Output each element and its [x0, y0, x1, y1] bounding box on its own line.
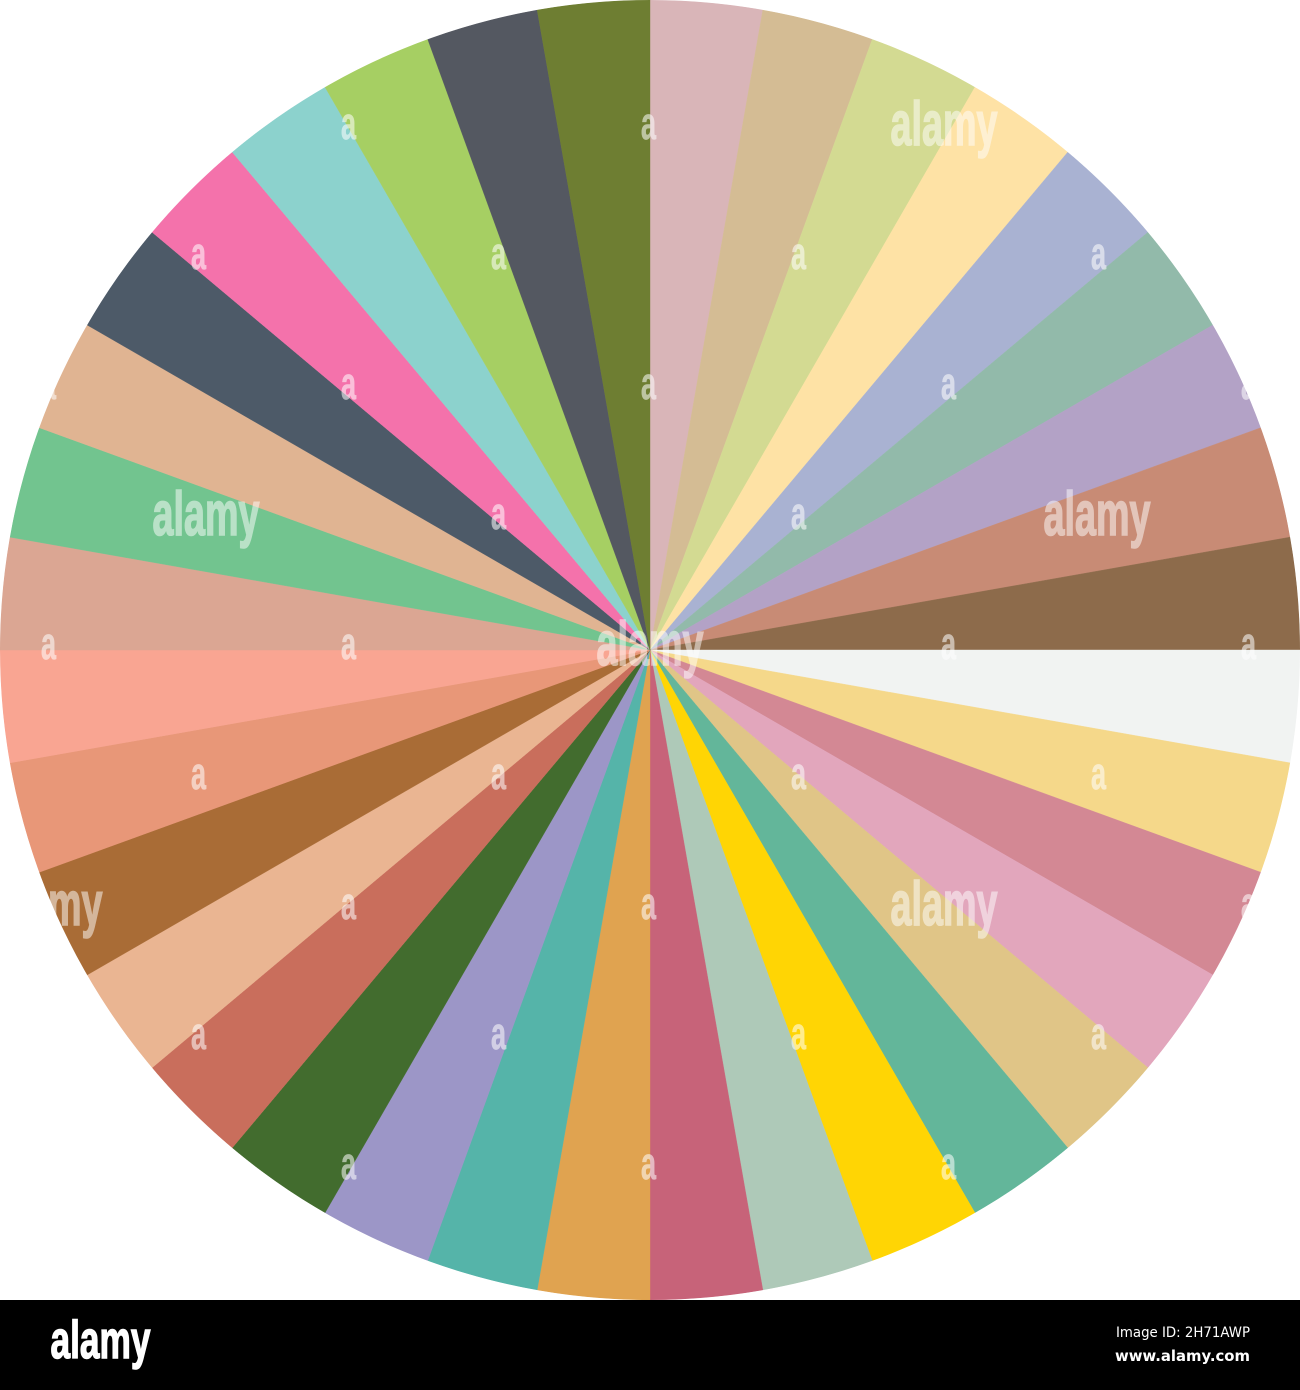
slice 24: peach tan [87, 650, 650, 1068]
footer logo: alamy [50, 1311, 151, 1370]
slice 6: sage green [650, 232, 1213, 650]
watermark: small repeated letters: a [1091, 228, 1107, 279]
watermark: small repeated letters: a [641, 878, 657, 929]
slice 1: dusty pink [650, 0, 763, 650]
slice 7: lavender [650, 325, 1261, 650]
slice 18: raspberry [650, 650, 763, 1300]
website: www.alamy.com [1115, 1347, 1250, 1365]
slice 27: light coral [0, 650, 650, 763]
watermark: small repeated letters: a [1241, 358, 1257, 409]
slice 15: jade [650, 650, 1068, 1213]
image id: Image ID: 2H71AWP [1116, 1325, 1250, 1341]
watermark: large brand words: alamy [890, 870, 998, 939]
slice 34: leaf green [325, 39, 650, 650]
slice 14: sand [650, 650, 1148, 1148]
watermark: large brand words: alamy [596, 610, 704, 679]
watermark: large brand words: alamy [152, 480, 260, 549]
slice 30: beige [39, 325, 650, 650]
slice 9: brown [650, 537, 1300, 650]
slice 25: ochre brown [39, 650, 650, 975]
watermark: small repeated letters: a [191, 748, 207, 799]
watermark: small repeated letters: a [491, 228, 507, 279]
watermark: small repeated letters: a [41, 358, 57, 409]
watermark: small repeated letters: a [191, 1008, 207, 1059]
watermark: small repeated letters: a [641, 358, 657, 409]
watermark: small repeated letters: a [791, 748, 807, 799]
slice 22: forest green [232, 650, 650, 1213]
watermark: small repeated letters [41, 98, 1257, 1189]
watermark: large brand words: alamy [0, 870, 103, 939]
slice 13: light pink [650, 650, 1213, 1068]
slice 11: light gold [650, 650, 1290, 872]
watermark: small repeated letters: a [791, 228, 807, 279]
watermark: small repeated letters: a [341, 98, 357, 149]
watermark: small repeated letters: a [491, 748, 507, 799]
watermark: large brand words: alamy [1044, 480, 1151, 549]
watermark: large brand words: alamy [890, 90, 998, 159]
watermark: small repeated letters: a [941, 618, 957, 669]
watermark: small repeated letters: a [941, 1138, 957, 1189]
slice 8: terracotta [650, 428, 1290, 650]
watermark: small repeated letters: a [341, 358, 357, 409]
slice 16: bright yellow [650, 650, 975, 1261]
slice 21: muted violet [325, 650, 650, 1261]
slice 26: salmon [10, 650, 650, 872]
watermark: small repeated letters: a [1241, 618, 1257, 669]
watermark: large brand words [0, 90, 1151, 939]
watermark: small repeated letters: a [491, 1008, 507, 1059]
slice 3: pale lime [650, 39, 975, 650]
watermark: small repeated letters: a [641, 1138, 657, 1189]
slice 35: charcoal [428, 10, 650, 650]
watermark: small repeated letters: a [341, 1138, 357, 1189]
watermark: small repeated letters: a [341, 878, 357, 929]
footer bar [0, 1300, 1300, 1390]
watermark: small repeated letters: a [491, 488, 507, 539]
watermark: small repeated letters: a [941, 358, 957, 409]
watermark: small repeated letters: a [191, 228, 207, 279]
watermark: small repeated letters: a [641, 98, 657, 149]
watermark: small repeated letters: a [1091, 1008, 1107, 1059]
watermark: small repeated letters: a [41, 618, 57, 669]
slice 23: brick [152, 650, 650, 1148]
slice 12: rose [650, 650, 1261, 975]
watermark: small repeated letters: a [1091, 748, 1107, 799]
watermark: small repeated letters: a [341, 618, 357, 669]
watermark: small repeated letters: a [1241, 878, 1257, 929]
slice 28: dusty salmon [0, 537, 650, 650]
slice 5: periwinkle [650, 152, 1148, 650]
slice 33: aqua [232, 87, 650, 650]
slice 20: teal [428, 650, 650, 1290]
watermark: small repeated letters: a [791, 488, 807, 539]
slice 2: tan [650, 10, 872, 650]
slice 32: hot pink [152, 152, 650, 650]
slice 10: off white [650, 650, 1300, 763]
slice 36: olive [537, 0, 650, 650]
slice 29: mint green [10, 428, 650, 650]
slice 19: amber [537, 650, 650, 1300]
watermark: small repeated letters: a [791, 1008, 807, 1059]
slice 17: pale sage [650, 650, 872, 1290]
slice 31: slate [87, 232, 650, 650]
slice 4: cream yellow [650, 87, 1068, 650]
